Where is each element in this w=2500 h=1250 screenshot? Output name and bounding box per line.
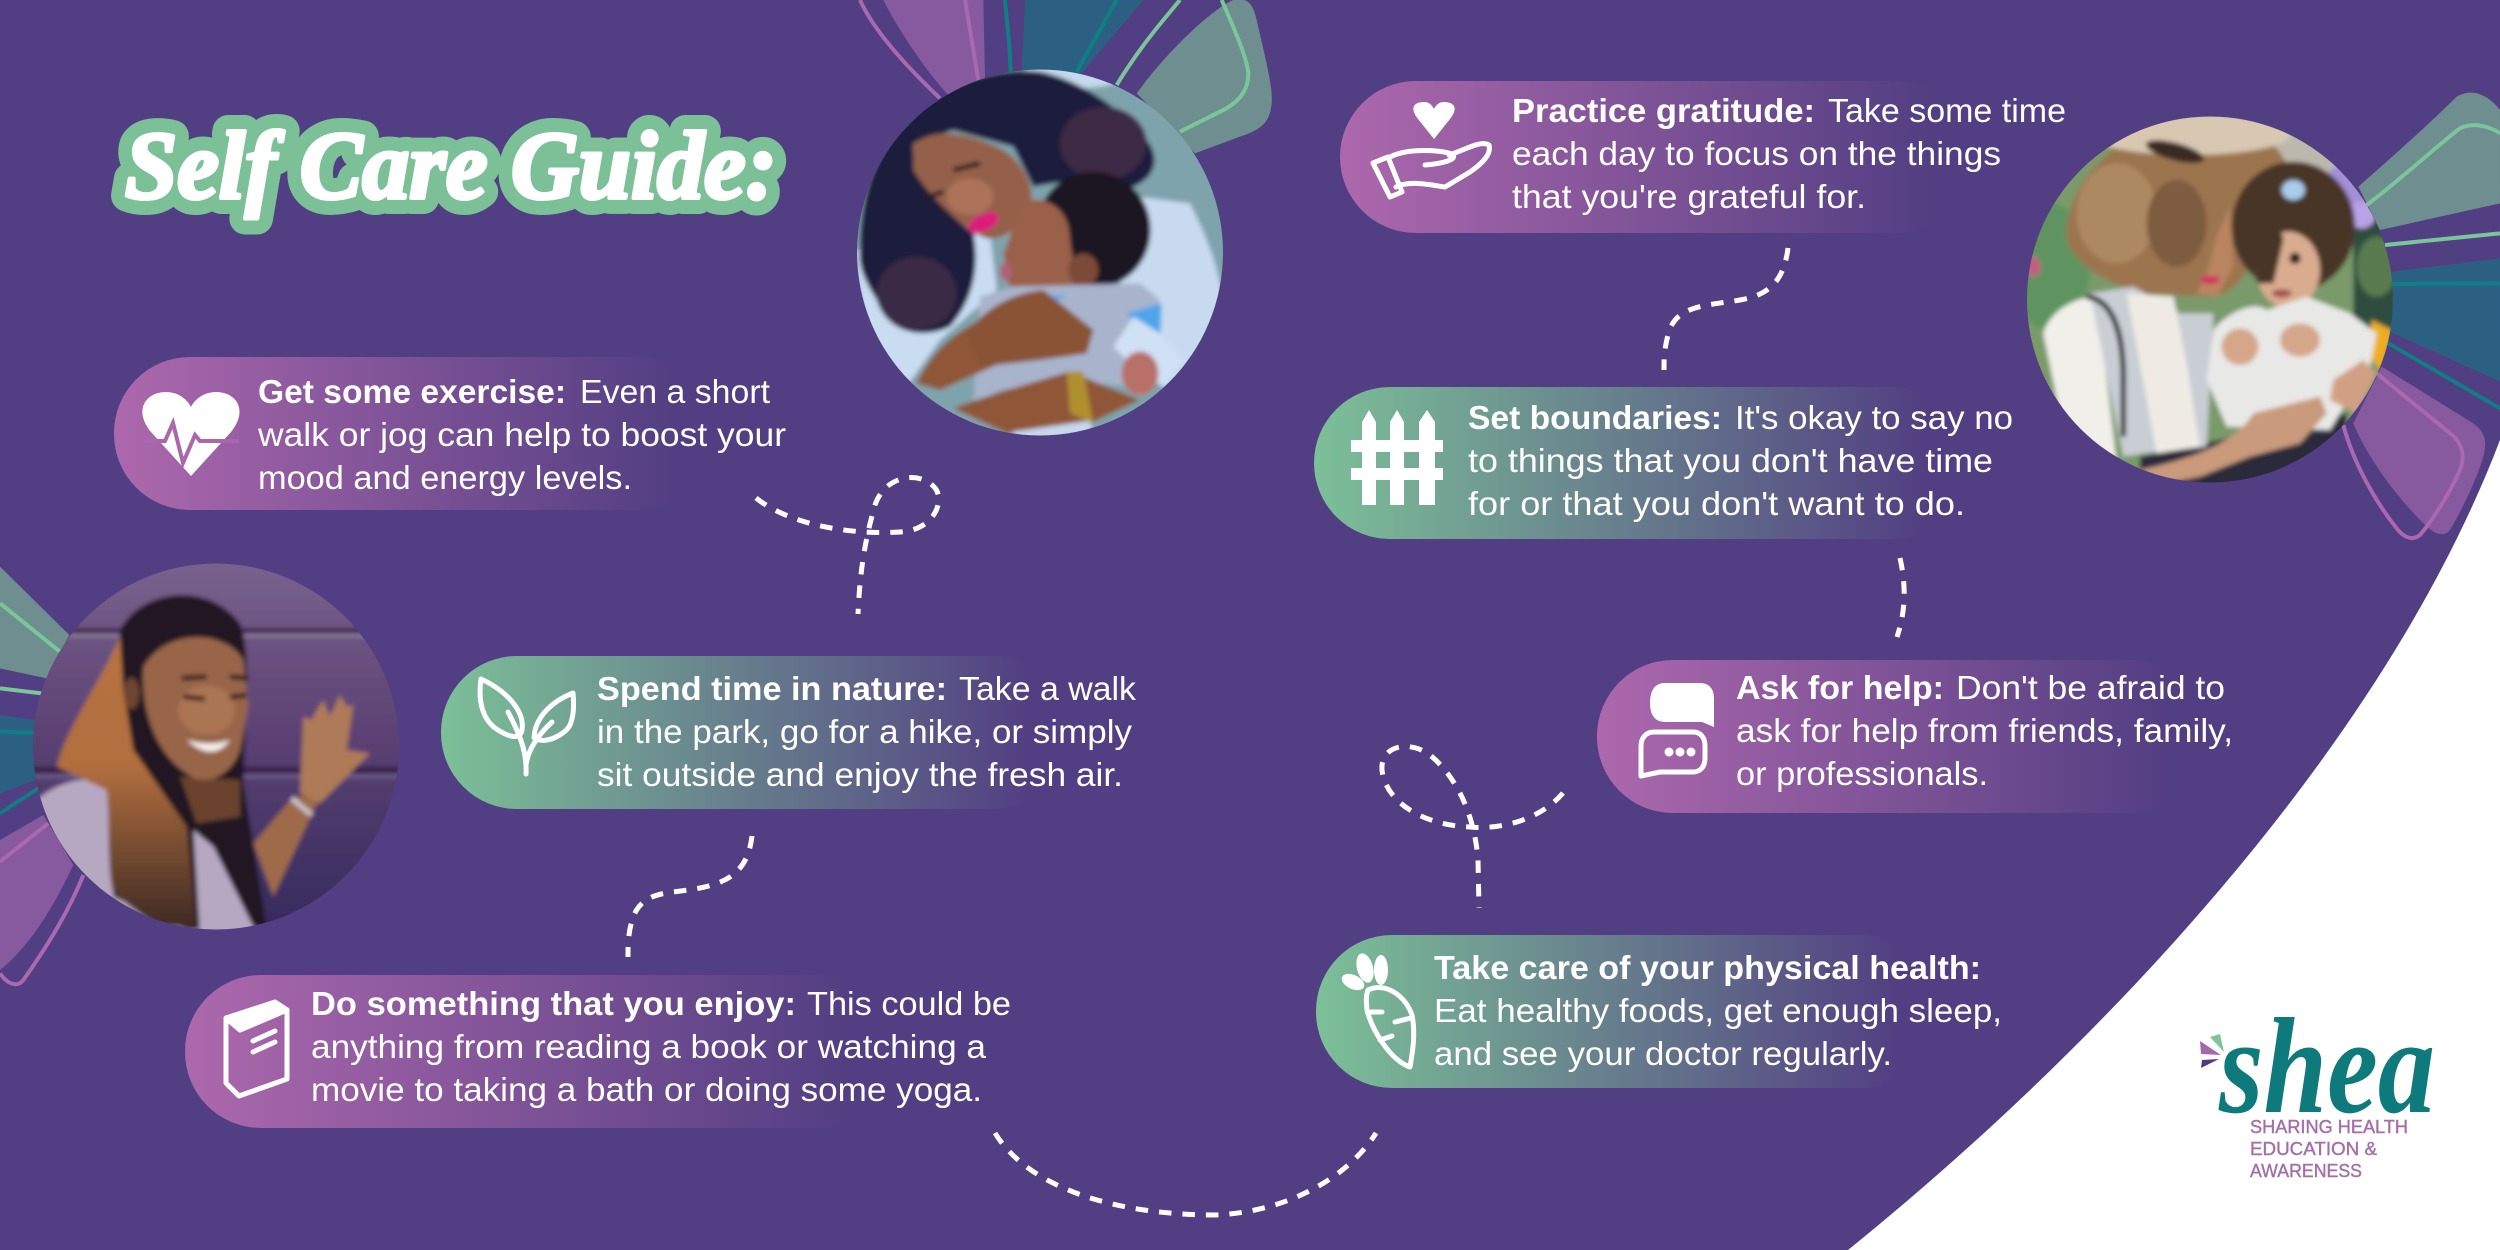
- panel: spend time in nature: in the park, go for a hike, or simply: [597, 713, 1133, 750]
- dashed connector: physical health to ask: [1382, 747, 1563, 908]
- petal fan: left: [0, 567, 83, 984]
- logo: shea: AWARENESS: [2250, 1161, 2362, 1181]
- panel: ask for help: Don't be afraid to: [1956, 669, 2225, 706]
- panel: get some exercise: [114, 357, 786, 510]
- icon: heart with pulse: [142, 392, 240, 476]
- photo: mother and daughter with curly hair: [2027, 116, 2393, 482]
- icon: fence: [1351, 410, 1443, 505]
- panel: do something that you enjoy: This could be: [807, 985, 1011, 1022]
- panel: spend time in nature: Spend time in nature:: [597, 670, 947, 707]
- panel: spend time in nature: Take a walk: [959, 670, 1137, 707]
- icon: sprout: [480, 679, 574, 774]
- photo: smiling woman against purple wall: [33, 564, 399, 930]
- icon: carrot: [1339, 951, 1414, 1067]
- icon: book: [226, 1002, 287, 1096]
- panel: practice gratitude: Take some time: [1828, 92, 2066, 129]
- panel: ask for help: Ask for help:: [1736, 669, 1944, 706]
- panel: spend time in nature: sit outside and enjoy the fresh air.: [597, 756, 1123, 793]
- dashed connector: nature to enjoy: [628, 836, 752, 957]
- icon: heart in hand: [1373, 102, 1489, 197]
- dashed connector: exercise to nature: [756, 478, 939, 614]
- panel: do something that you enjoy: anything from reading a book or watching a: [311, 1028, 987, 1065]
- logo: shea: shea: [2218, 990, 2435, 1142]
- panel: take care of your physical health: Take care of your physical health:: [1434, 949, 1981, 986]
- title: Self Care Guide:: [125, 112, 777, 219]
- panel: do something that you enjoy: [185, 975, 1011, 1128]
- panel: practice gratitude: that you're grateful for.: [1512, 178, 1866, 215]
- panel: practice gratitude: each day to focus on the things: [1512, 135, 2001, 172]
- dashed connector: ask to boundaries: [1897, 558, 1904, 637]
- petal fan: right: [2343, 93, 2500, 538]
- dashed connector: enjoy to physical health: [995, 1133, 1376, 1215]
- panel: take care of your physical health: Eat healthy foods, get enough sleep,: [1434, 992, 2002, 1029]
- panel: get some exercise: Even a short: [580, 373, 770, 410]
- dashed connector: boundaries to gratitude: [1664, 248, 1788, 370]
- title: Self Care Guide:: [125, 112, 777, 219]
- logo: shea: SHARING HEALTH: [2250, 1117, 2408, 1137]
- panel: get some exercise: walk or jog can help to boost your: [257, 416, 786, 453]
- panel: ask for help: [1597, 660, 2233, 813]
- logo: shea: [2200, 990, 2435, 1181]
- panel: practice gratitude: [1340, 81, 2066, 233]
- logo: shea: EDUCATION &: [2250, 1139, 2377, 1159]
- panel: spend time in nature: [441, 656, 1137, 809]
- panel: get some exercise: mood and energy levels.: [258, 459, 632, 496]
- panel: set boundaries: [1314, 387, 2013, 539]
- panel: practice gratitude: Practice gratitude:: [1512, 92, 1815, 129]
- panel: set boundaries: to things that you don't have time: [1468, 442, 1993, 479]
- panel: do something that you enjoy: movie to taking a bath or doing some yoga.: [311, 1071, 982, 1108]
- photo: mother holding baby: [857, 70, 1223, 436]
- icon: chat bubbles: [1641, 683, 1714, 776]
- petal fan: top: [860, 0, 1272, 153]
- panel: ask for help: ask for help from friends, family,: [1736, 712, 2233, 749]
- white corner curve: [1848, 440, 2500, 1250]
- panel: set boundaries: for or that you don't want to do.: [1468, 485, 1965, 522]
- panel: take care of your physical health: and see your doctor regularly.: [1434, 1035, 1892, 1072]
- panel: get some exercise: Get some exercise:: [258, 373, 566, 410]
- panel: do something that you enjoy: Do something that you enjoy:: [311, 985, 796, 1022]
- panel: set boundaries: Set boundaries:: [1468, 399, 1722, 436]
- panel: set boundaries: It's okay to say no: [1735, 399, 2013, 436]
- panel: take care of your physical health: [1316, 935, 2002, 1088]
- panel: ask for help: or professionals.: [1736, 755, 1988, 792]
